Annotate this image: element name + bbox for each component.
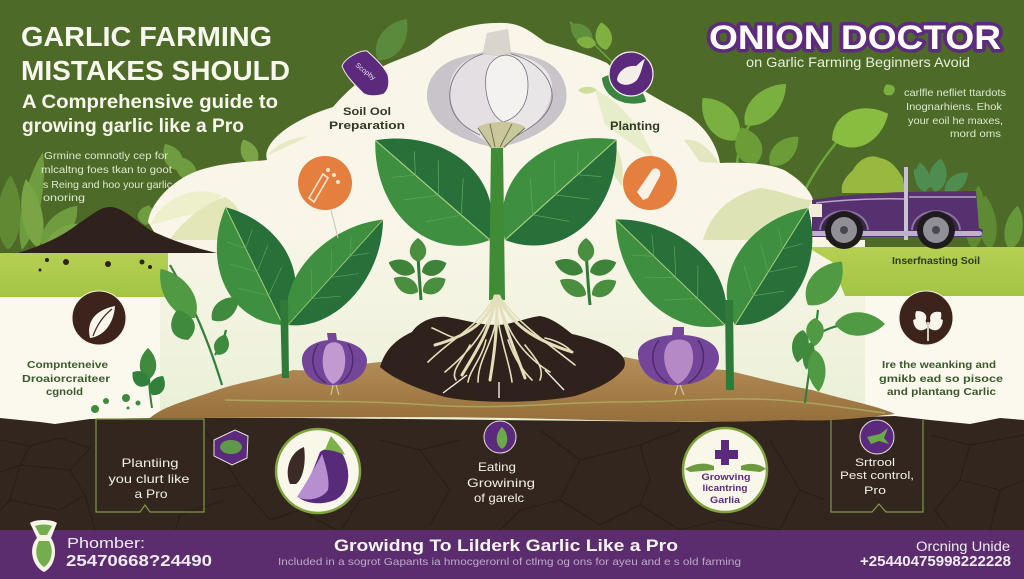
pale hills inside the cloud <box>150 87 812 255</box>
left intro text: s Reing and hoo your garlic <box>43 179 172 191</box>
centre caption: of garelc <box>474 491 524 505</box>
purple garlic left <box>302 333 367 395</box>
callout: planting frame: Plantiing <box>122 456 178 470</box>
footer phone left <box>66 536 212 570</box>
callout: pest control frame: Srtrool <box>855 457 895 469</box>
callout: pest control frame: Pest control, <box>840 470 914 482</box>
icon: footer garlic tag <box>30 520 57 572</box>
heading: soil preparation: Preparation <box>329 120 405 132</box>
icon: purple circle leaf <box>484 421 516 453</box>
right top foliage <box>691 75 1024 252</box>
mound root line <box>225 399 885 413</box>
heading: soil preparation: Soil Ool <box>343 106 391 118</box>
icon: purple tag soil <box>342 51 389 96</box>
footer phone right: +25440475998222228 <box>860 553 1011 570</box>
brand subtitle: on Garlic Farming Beginners Avoid <box>746 55 970 70</box>
tan soil mound <box>150 357 895 422</box>
centre pale green band <box>160 240 865 426</box>
title: growing garlic like a Pro <box>22 115 244 137</box>
footer headline <box>278 536 741 568</box>
left description text: Droaiorcraiteer <box>22 373 110 385</box>
right lime ground <box>807 247 1024 296</box>
right description text: Ire the weanking and <box>882 359 996 371</box>
left intro text: Grmine comnotly cep for <box>44 150 169 162</box>
footer phone right: Orcning Unide <box>916 539 1010 554</box>
left description text <box>22 359 110 398</box>
footer headline: Included in a sogrot Gapants ia hmocgerornl of ctlmg og ons for ayeu and e s old farming <box>278 556 741 568</box>
right side branch plant <box>789 253 885 403</box>
title <box>21 21 290 137</box>
small centre plants <box>386 238 620 305</box>
centre dark soil mound <box>380 316 625 402</box>
title: GARLIC FARMING <box>21 21 272 52</box>
callout: planting frame: a Pro <box>134 487 168 501</box>
truck <box>810 156 983 249</box>
right main plant <box>591 189 838 390</box>
soil lower layer <box>0 416 1024 532</box>
centre caption: Growining <box>467 476 535 490</box>
left intro text: onoring <box>43 192 85 204</box>
badge: growing garlic with cross <box>683 428 767 512</box>
callout: pest control frame: Pro <box>864 485 886 497</box>
left grass leaves <box>0 136 262 258</box>
top background leaves <box>368 12 614 67</box>
right intro text: carlfle nefliet ttardots <box>904 87 1006 99</box>
icon: orange circle tools <box>298 156 352 238</box>
right description text: and plantang Carlic <box>887 386 996 398</box>
icon: brown circle leaf <box>72 291 126 345</box>
callout: planting frame: you clurt like <box>108 472 190 486</box>
right intro text: your eoil he maxes, <box>908 115 1003 127</box>
title: A Comprehensive guide to <box>22 91 278 113</box>
right intro text <box>904 87 1006 140</box>
centre caption <box>467 460 535 505</box>
left description text: Compnteneive <box>27 359 108 371</box>
right intro text: Inognarhiens. Ehok <box>906 101 1003 113</box>
icon: purple circle clove with leaf <box>596 52 653 112</box>
callout: pest control frame <box>831 420 923 512</box>
soil cracks <box>0 430 1024 532</box>
left lime ground <box>0 253 168 297</box>
heading: planting: Planting <box>610 121 660 133</box>
soil pointer lines <box>443 370 564 398</box>
left intro text <box>41 150 172 204</box>
central plant stem and leaves <box>347 108 645 300</box>
badge: growing garlic with cross: Garlia <box>710 495 741 505</box>
icon: purple leaf tag <box>214 430 248 465</box>
centre caption: Eating <box>478 460 516 474</box>
footer phone left: Phomber: <box>67 536 145 552</box>
footer phone right <box>860 539 1011 570</box>
heading: soil preparation <box>329 106 405 132</box>
left description text: cgnold <box>46 386 83 398</box>
left side branch plants <box>128 261 245 408</box>
left main plant <box>194 192 405 378</box>
cream cloud backdrop <box>148 23 830 300</box>
icon: orange circle clove <box>623 156 677 210</box>
label: soil: Inserfnasting Soil <box>892 255 980 267</box>
right description text <box>879 359 1003 398</box>
icon: purple tag soil: Scopby <box>354 62 377 82</box>
callout: planting frame <box>96 419 204 512</box>
right description text: gmikb ead so pisoce <box>879 373 1003 385</box>
title: MISTAKES SHOULD <box>21 55 290 86</box>
brand title: onion doctor: ONION DOCTOR <box>709 19 1001 57</box>
icon: brown circle sprout <box>899 291 953 345</box>
badge: growing garlic with cross: Growving <box>702 472 750 482</box>
left soil pile <box>18 207 217 272</box>
footer bar <box>0 530 1024 579</box>
lower cream band <box>0 296 1024 426</box>
purple garlic right <box>638 327 719 395</box>
green seed dots <box>91 394 140 413</box>
left intro text: mlcaltng foes tkan to goot <box>41 164 172 176</box>
footer headline: Growidng To Lilderk Garlic Like a Pro <box>334 536 678 555</box>
right intro text: mord oms <box>950 128 1001 140</box>
icon: onion badge <box>276 429 360 513</box>
badge: growing garlic with cross: licantring <box>702 483 748 493</box>
large white garlic bulb <box>427 29 567 148</box>
central roots <box>428 296 575 382</box>
footer phone left: 25470668?24490 <box>66 553 212 570</box>
